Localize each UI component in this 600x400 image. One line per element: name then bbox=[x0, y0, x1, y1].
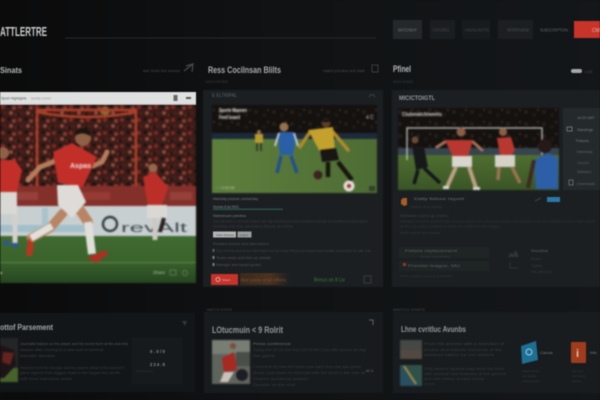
icon: orange info tile: Info bbox=[590, 350, 597, 355]
progress bar bbox=[213, 208, 283, 210]
body text: and club history at each venue bbox=[424, 377, 484, 381]
body text: transfer window bbox=[20, 354, 56, 358]
photo: yellow player with ball bbox=[212, 105, 377, 193]
red stadium boards bbox=[0, 186, 196, 206]
panel: bottom left player feature bbox=[0, 313, 195, 392]
yellow player bbox=[300, 118, 352, 180]
side menu: Downloads bbox=[577, 182, 595, 186]
thumbnail photo bbox=[212, 340, 250, 384]
heading: LOtucmuin < 9 Rolrit bbox=[212, 325, 283, 335]
heading: Pfinel bbox=[393, 64, 411, 75]
thumbnail map bbox=[400, 365, 422, 386]
body text: stadium taken by our writers bbox=[424, 353, 495, 357]
panel: highlights: LIVE bbox=[585, 70, 593, 74]
stats box: Season total bbox=[136, 369, 153, 373]
photo: red team player striking: revAlt bbox=[121, 220, 188, 235]
blue player bbox=[275, 122, 298, 173]
article text: Manager and squad quotes bbox=[216, 263, 261, 267]
buttons bbox=[213, 232, 236, 238]
red call to action: Bet pass and offers bbox=[241, 278, 287, 282]
article summary: as the top clubs continue to battle for position in the league bbox=[400, 224, 500, 228]
panel: highlights bbox=[392, 64, 600, 287]
results list: Score summary bbox=[420, 254, 451, 258]
navigation buttons: FIXTURES bbox=[433, 28, 449, 32]
footballs bbox=[314, 170, 354, 192]
photo: goalmouth action: Clubmatch/weets bbox=[402, 112, 442, 118]
icon: orange info tile: archive bbox=[572, 379, 582, 383]
panel: bottom middle player feature: MATCH STATS bbox=[207, 308, 233, 312]
panel: match centre: match preview and stats bbox=[323, 69, 365, 73]
body text: season after moving to a new club in summer bbox=[20, 348, 105, 352]
photo caption: Share bbox=[153, 270, 166, 275]
article text: Club has been in form this season with high pressing and quick transitions through the midfield and wide players bbox=[213, 220, 368, 224]
results list: Premier league, MU bbox=[408, 264, 461, 268]
white ad board bbox=[0, 206, 196, 236]
side menu bbox=[563, 108, 600, 190]
icon: orange info tile: Info and bbox=[572, 369, 583, 373]
icon: orange info tile: club news bbox=[572, 374, 586, 378]
small yellow player bbox=[255, 130, 263, 151]
body text: Some look back on first half with the best in the side at bbox=[253, 371, 365, 375]
body text: Today the 20 for the first 100 in the Club with scores all day bbox=[253, 348, 367, 352]
icon: arrow bbox=[184, 64, 193, 72]
body text: the game bbox=[253, 354, 275, 358]
browser bar bbox=[0, 92, 196, 105]
heading: Sinats bbox=[0, 65, 22, 75]
panel: bottom middle player feature bbox=[204, 308, 383, 393]
panel: sports feature: see more live scores bbox=[143, 69, 180, 73]
body text: Chance scored by season bbox=[253, 377, 308, 381]
body text: Journalist feature on the player and his recent form at the club this bbox=[20, 342, 128, 346]
stats box: 224.5 bbox=[150, 362, 166, 367]
heading: Lhne cvritluc Avunbs bbox=[401, 324, 466, 334]
navigation buttons: INTERVIEW bbox=[507, 28, 530, 32]
stats box: 0.0/0 bbox=[150, 349, 166, 354]
red call to action: Bonus on 8 Liv bbox=[314, 278, 345, 284]
main player bbox=[26, 128, 108, 263]
body text: photos and historic moments of the bbox=[424, 348, 502, 352]
photo: yellow player with ball: Feed lusard bbox=[219, 115, 240, 121]
icon: blue app tile: Match fixture bbox=[522, 369, 540, 373]
body text bbox=[253, 342, 373, 387]
photo: yellow player with ball: 4 C bbox=[366, 115, 374, 121]
panel: sports feature bbox=[0, 64, 196, 283]
side menu: Squads bbox=[577, 161, 589, 165]
body text: more bbox=[424, 382, 435, 386]
article summary: Highlights from this weekend with selected reports from across the division and analysis of the key moments in each match played bbox=[400, 220, 595, 224]
icon: page bbox=[372, 65, 378, 72]
blue kit player bbox=[528, 139, 558, 189]
thumbnail bbox=[400, 340, 422, 359]
body text: Reaction from the manager and the players ahead of the weekend bbox=[20, 366, 124, 370]
results list: More match content available bbox=[400, 274, 452, 278]
panel: match centre: MATCH REVIEW bbox=[206, 80, 228, 84]
navigation buttons bbox=[393, 20, 600, 39]
body text: This week's tactical map from the fans bbox=[424, 367, 505, 371]
body text bbox=[20, 342, 128, 381]
goal frame bbox=[37, 110, 136, 194]
article text: Matchroom preview bbox=[213, 214, 246, 218]
panel: bottom right related bbox=[393, 308, 600, 393]
results list bbox=[399, 247, 552, 278]
article summary: Daily fixture report bbox=[414, 196, 465, 201]
header bbox=[0, 20, 600, 39]
article summary: Home and away bbox=[410, 205, 443, 209]
article summary bbox=[400, 196, 595, 235]
results list: Recent bbox=[531, 257, 541, 261]
photo: yellow player with ball: Sporte Mannen bbox=[219, 108, 247, 114]
body text: From the archive with a selection of bbox=[424, 342, 504, 346]
browser bar: Sport Highlights bbox=[1, 96, 27, 100]
red call to action: Watch bbox=[222, 278, 231, 282]
results list: Resultsbar bbox=[531, 249, 549, 253]
icon: blue app tile: live results bbox=[522, 374, 537, 378]
article text: Matchday pressure commentary bbox=[213, 196, 258, 201]
photo: red team player striking bbox=[0, 105, 196, 283]
navigation buttons: CM bbox=[592, 28, 600, 34]
body text: with several new features of the ground bbox=[424, 372, 506, 376]
article text: Related stories and discussion bbox=[213, 242, 269, 246]
left player bbox=[0, 147, 22, 247]
navigation buttons: MATCHDAY bbox=[398, 28, 417, 32]
results list: Fixture replacement bbox=[405, 249, 457, 253]
icon: arc bbox=[369, 94, 375, 97]
side menu: Jul 20 GMT bbox=[577, 116, 595, 120]
body text bbox=[424, 342, 504, 357]
body text: with more interviews online bbox=[20, 377, 72, 381]
panel: match centre bbox=[203, 65, 383, 287]
side menu: Fixtures bbox=[576, 139, 589, 143]
goal frame bbox=[407, 128, 542, 160]
title: ATTLERTRE bbox=[0, 24, 47, 39]
article summary: More reports and scores bbox=[400, 231, 440, 235]
side menu: Statistics bbox=[577, 170, 592, 174]
panel: highlights: MICICTOIGTL bbox=[399, 96, 435, 102]
navigation buttons: SUBSCRIPTION bbox=[540, 28, 568, 32]
side menu: Matchday bbox=[577, 150, 593, 154]
article text: Scores 8 jul 2021 bbox=[213, 204, 240, 209]
body text: Press conference bbox=[253, 342, 291, 346]
panel: match centre: E ELTRIPAL bbox=[212, 93, 237, 99]
body text: game against their biggest rivals in the league this month bbox=[20, 371, 120, 375]
icon: orange badge bbox=[401, 198, 407, 206]
icon: blue app tile: Carcos bbox=[540, 350, 553, 355]
heading: Ress Cocilnsan Blilts bbox=[208, 65, 281, 75]
side menu: Standings bbox=[577, 128, 593, 132]
panel: highlights: WEEK ROUND bbox=[393, 80, 413, 84]
icon: pin bbox=[182, 321, 187, 326]
article text: leading into this weekend fixture at home bbox=[213, 224, 293, 228]
article text: Log in bbox=[240, 233, 249, 237]
results list: Mar 14th 8 Uni bbox=[531, 270, 552, 274]
red kit player centre bbox=[437, 128, 482, 190]
body text: M U bbox=[366, 368, 373, 373]
body text: Decider at the end bbox=[253, 383, 295, 387]
article summary: Midweek round-up review bbox=[400, 214, 449, 218]
browser bar: weekly scores bbox=[31, 96, 51, 100]
icon: share bbox=[369, 320, 373, 325]
navigation buttons: HIGHLIGHTS bbox=[465, 28, 489, 32]
icon: orange info tile bbox=[571, 342, 597, 383]
red kit player right bbox=[495, 128, 520, 183]
body text: Comment on how the team look back from the last game bbox=[253, 365, 361, 369]
article text: Kick off time and venue information for the home fixture and away travel details and tickets on sale now bbox=[216, 249, 372, 253]
icon: orange info tile: i bbox=[576, 348, 579, 360]
thumbnail bbox=[0, 338, 18, 382]
red call to action bbox=[211, 273, 371, 285]
article text bbox=[212, 196, 372, 267]
heading: ottof Parsement bbox=[0, 323, 53, 332]
stats box bbox=[132, 338, 182, 384]
panel: bottom right related: MATCH STATS bbox=[393, 308, 426, 312]
black kit player bbox=[412, 136, 440, 184]
article text: Team news and line-up details bbox=[216, 256, 272, 260]
results list: Outside bbox=[531, 264, 542, 268]
main player: Aspas bbox=[70, 163, 91, 170]
photo: goalmouth action bbox=[398, 108, 559, 190]
icon: blue app tile bbox=[521, 341, 553, 383]
body text bbox=[424, 367, 506, 386]
video controls: ‹ › 0:05:08 bbox=[217, 186, 234, 190]
grass bbox=[0, 236, 196, 283]
article text: View fixtures bbox=[216, 233, 235, 237]
icon: blue app tile: season guide bbox=[522, 379, 540, 383]
right player bbox=[143, 164, 168, 240]
